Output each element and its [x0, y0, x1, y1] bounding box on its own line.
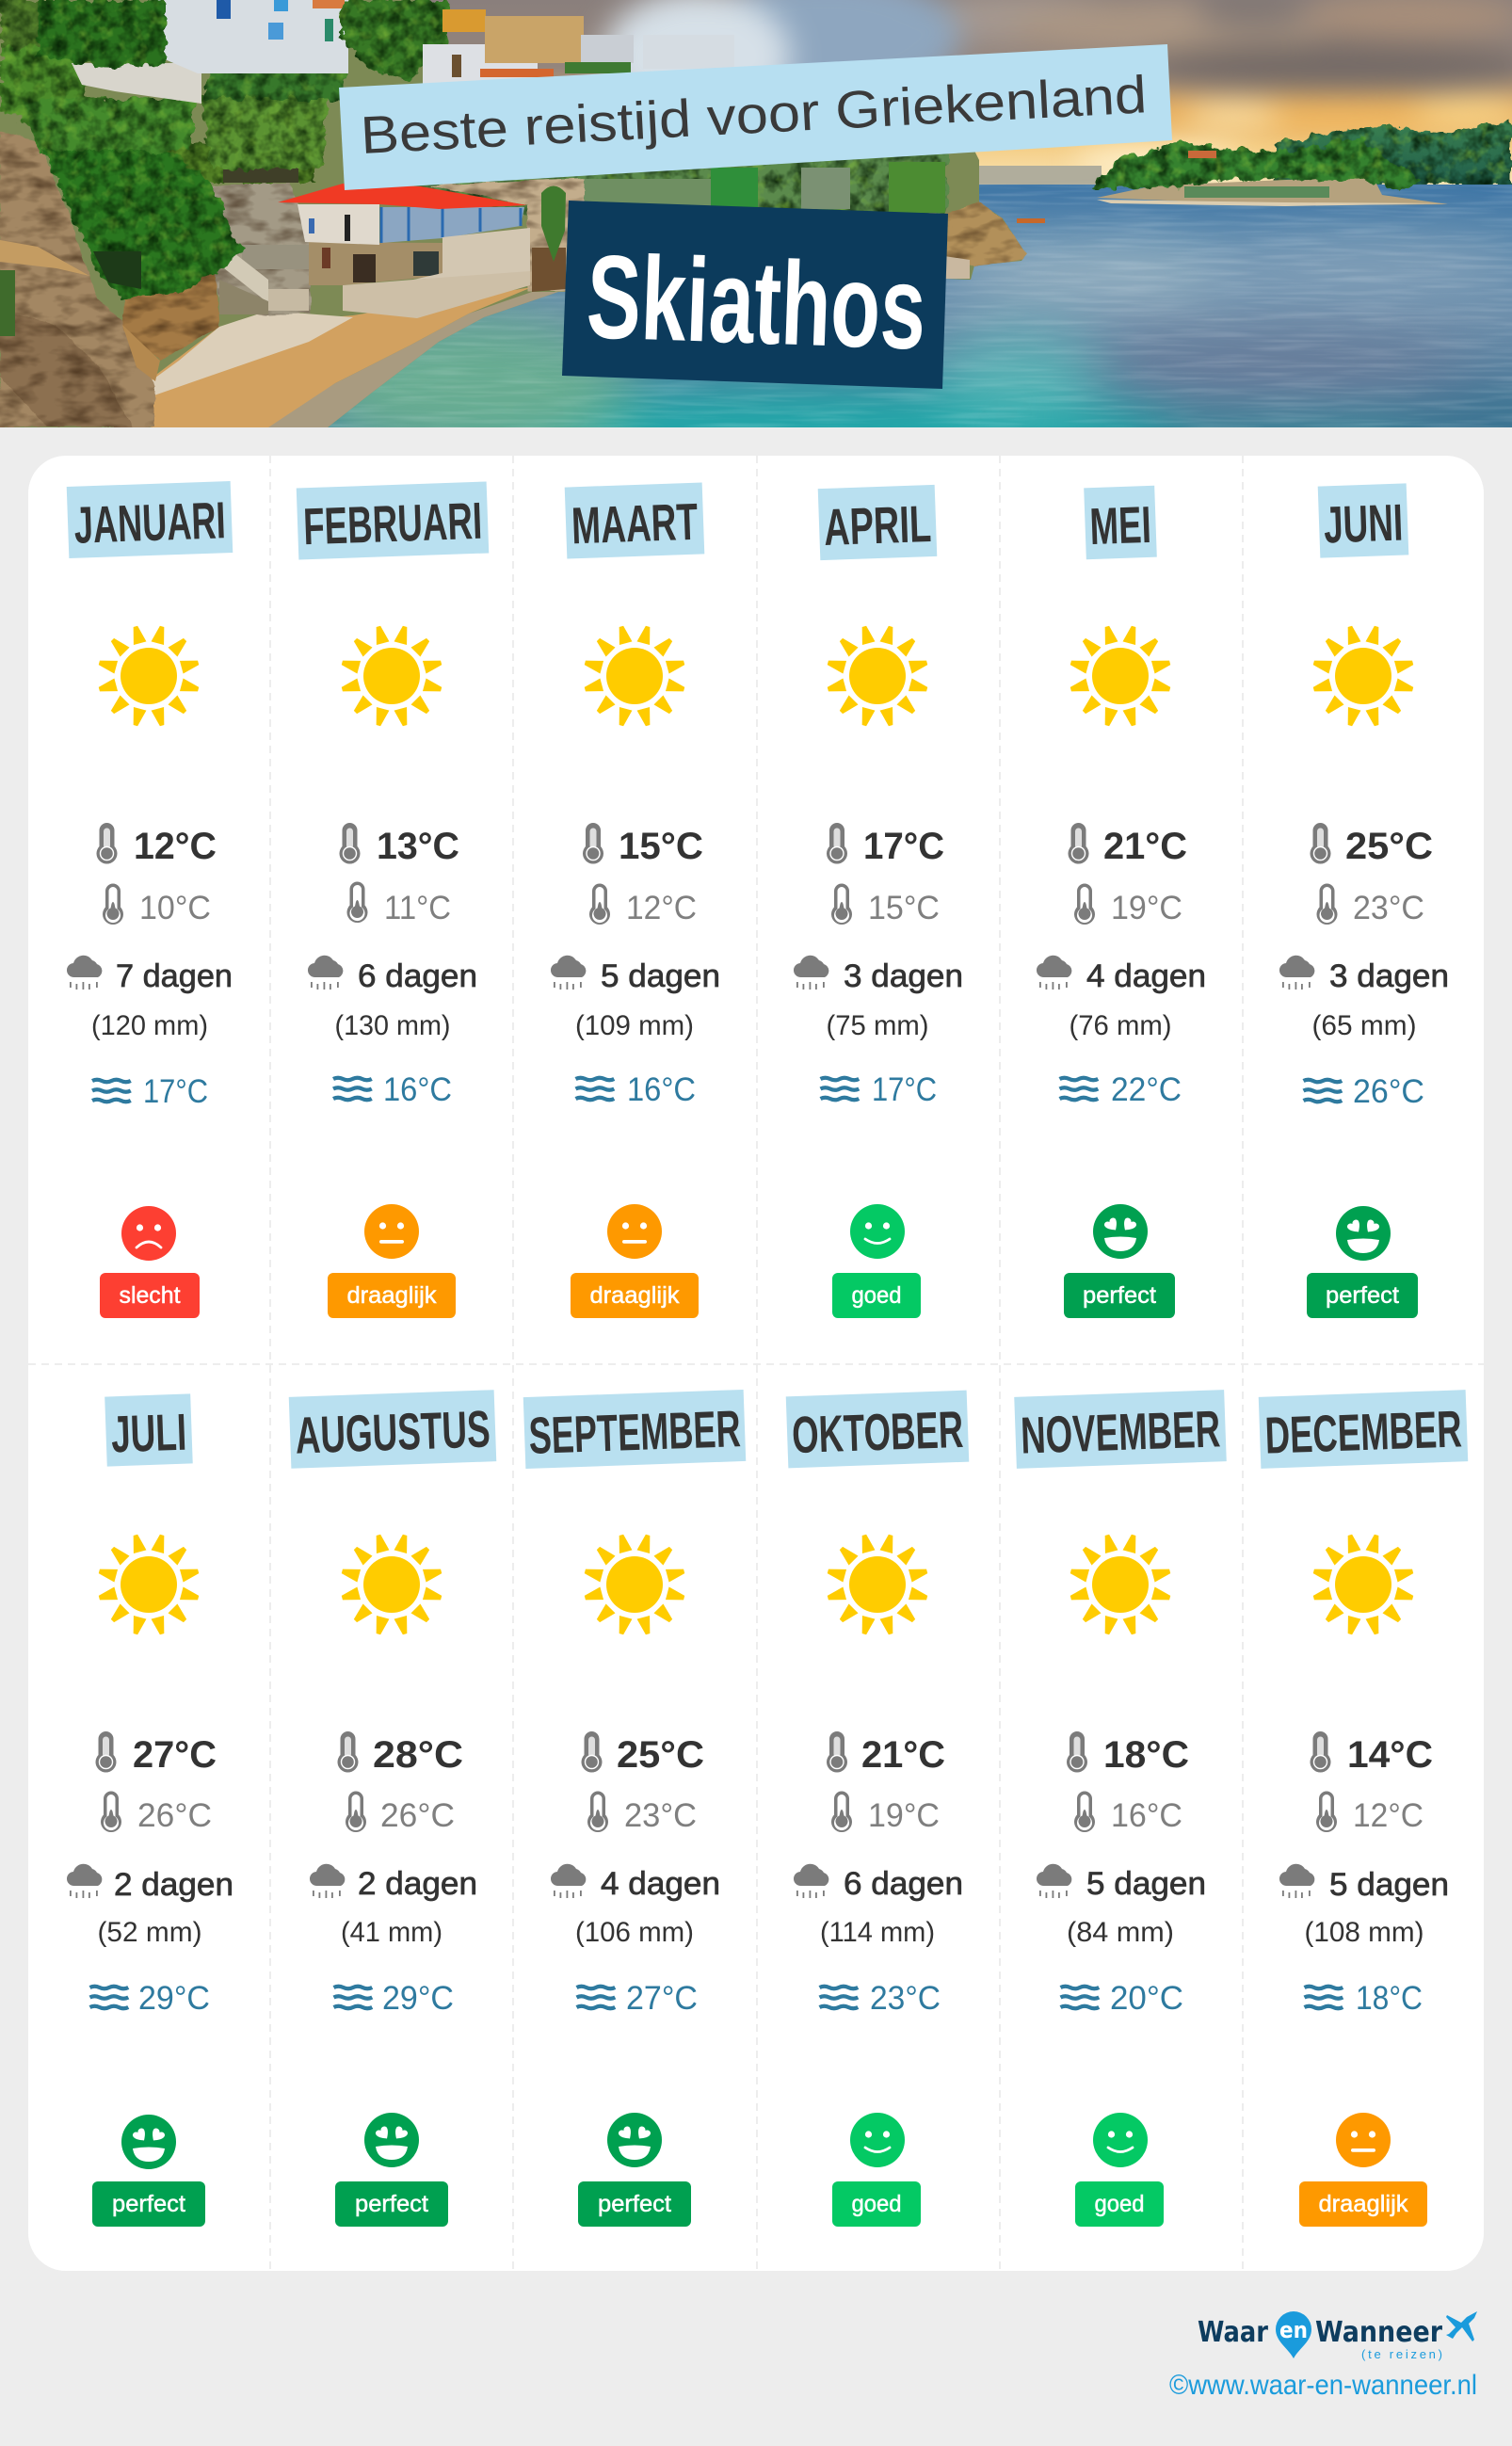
panel: oktober	[786, 1391, 969, 2227]
sea temperature: 26°C	[1353, 1073, 1424, 1110]
month label: FEBRUARI	[302, 491, 483, 555]
high temperature	[96, 823, 217, 867]
sea temperature: 22°C	[1111, 1071, 1182, 1108]
sea temperature	[821, 1071, 937, 1108]
low temperature: 26°C	[137, 1797, 212, 1834]
sea temperature	[1303, 1073, 1424, 1110]
rain days: 4 dagen	[1086, 958, 1206, 994]
low temperature: 11°C	[384, 890, 451, 926]
sea temperature: 20°C	[1110, 1980, 1183, 2017]
sea temperature: 29°C	[138, 1980, 210, 2017]
rainfall: (130 mm)	[335, 1010, 450, 1041]
sea temperature	[1060, 1980, 1183, 2017]
rain days	[551, 1864, 720, 1902]
sea temperature: 18°C	[1356, 1980, 1423, 2017]
rainfall: (76 mm)	[1070, 1010, 1171, 1041]
month label: AUGUSTUS	[295, 1399, 491, 1465]
high temperature	[827, 823, 944, 867]
source url: ©www.waar-en-wanneer.nl	[1169, 2370, 1477, 2401]
high temperature: 27°C	[133, 1734, 217, 1776]
icon: map pin	[1276, 2311, 1311, 2358]
high temperature: 28°C	[373, 1734, 463, 1776]
month label	[565, 482, 704, 559]
houses on top of hill	[72, 63, 201, 104]
high temperature	[1068, 823, 1187, 867]
rating: perfect	[335, 2113, 448, 2227]
low temperature	[1074, 883, 1182, 926]
panel: mei	[1037, 486, 1206, 1318]
rainfall: (65 mm)	[1312, 1010, 1416, 1041]
rating: perfect	[92, 2115, 205, 2227]
islet	[1097, 176, 1448, 205]
rainfall: (106 mm)	[575, 1917, 694, 1948]
low temperature	[587, 1791, 697, 1834]
rain days: 2 dagen	[358, 1866, 477, 1902]
title banner: Skiathos	[585, 230, 928, 375]
header photo: Skiathos harbour	[0, 0, 1512, 427]
rating: goed: goed	[1094, 2191, 1145, 2217]
rainfall: (108 mm)	[1305, 1917, 1424, 1948]
low temperature	[103, 883, 211, 926]
rain days	[1279, 956, 1449, 994]
panel: februari	[297, 481, 489, 1318]
panel: juni	[1279, 483, 1449, 1318]
icon: sun	[1070, 1534, 1171, 1635]
sea temperature: 17°C	[872, 1071, 937, 1108]
high temperature	[1311, 823, 1433, 867]
month label: OKTOBER	[791, 1400, 964, 1464]
low temperature: 23°C	[624, 1797, 697, 1834]
rain days: 7 dagen	[116, 958, 233, 994]
rain days: 5 dagen	[1329, 1867, 1449, 1903]
month label: JUNI	[1323, 493, 1404, 554]
rain days: 6 dagen	[358, 958, 477, 994]
icon: sun	[98, 1534, 200, 1635]
sea temperature	[333, 1980, 454, 2017]
rating: draaglijk: draaglijk	[346, 1282, 437, 1309]
month label	[67, 481, 233, 558]
month label	[818, 485, 937, 560]
low temperature: 23°C	[1353, 890, 1424, 926]
rainfall: (114 mm)	[820, 1917, 935, 1948]
high temperature	[1311, 1731, 1433, 1776]
rain days	[794, 956, 963, 994]
icon: sun	[341, 1534, 442, 1635]
month label	[786, 1391, 969, 1468]
rain days: 3 dagen	[1329, 958, 1449, 994]
rating: perfect: perfect	[1083, 1282, 1156, 1309]
rating: goed: goed	[851, 1282, 902, 1309]
high temperature: 21°C	[861, 1734, 945, 1776]
high temperature	[582, 1731, 704, 1776]
rating: goed: goed	[851, 2191, 902, 2217]
month label	[105, 1393, 193, 1467]
sea temperature	[1305, 1980, 1423, 2017]
panel: september	[523, 1390, 746, 2227]
rating: goed	[832, 2113, 921, 2227]
month label: NOVEMBER	[1020, 1399, 1221, 1465]
trees	[151, 141, 316, 182]
rating: draaglijk	[1299, 2113, 1427, 2227]
rainfall: (75 mm)	[827, 1010, 928, 1041]
month label: JULI	[110, 1403, 187, 1463]
rain days	[551, 956, 720, 994]
rating: goed	[1075, 2113, 1164, 2227]
low temperature	[346, 881, 451, 926]
high temperature	[583, 823, 703, 867]
icon: sun	[1070, 625, 1171, 727]
sea temperature: 16°C	[383, 1071, 452, 1108]
high temperature: 17°C	[863, 826, 944, 867]
rain days: 6 dagen	[844, 1866, 963, 1902]
title banner	[562, 201, 948, 389]
low temperature: 12°C	[626, 890, 697, 926]
low temperature	[346, 1791, 455, 1834]
rating: perfect: perfect	[598, 2191, 671, 2217]
rain days: 3 dagen	[844, 958, 963, 994]
rainfall: (109 mm)	[575, 1010, 694, 1041]
panel: november	[1014, 1390, 1227, 2227]
logo: Waar en Wanneer: (te reizen)	[1361, 2347, 1442, 2361]
high temperature	[96, 1731, 217, 1776]
logo: Waar en Wanneer: Wanneer	[1315, 2316, 1442, 2349]
month label: MAART	[571, 492, 699, 555]
high temperature: 21°C	[1103, 826, 1187, 867]
rain days: 5 dagen	[1086, 1866, 1206, 1902]
icon: sun	[827, 625, 928, 727]
sea temperature	[333, 1071, 452, 1108]
low temperature: 19°C	[868, 1797, 940, 1834]
icon: sun	[1312, 625, 1414, 727]
logo: Waar en Wanneer	[1198, 2311, 1477, 2361]
high temperature	[1067, 1731, 1189, 1776]
month label	[1084, 486, 1157, 559]
month label	[523, 1390, 746, 1469]
rating: goed	[832, 1204, 921, 1318]
rating: perfect	[1064, 1204, 1175, 1318]
low temperature: 26°C	[380, 1797, 455, 1834]
rating: draaglijk: draaglijk	[589, 1282, 680, 1309]
rain days: 4 dagen	[601, 1866, 720, 1902]
rating: draaglijk	[328, 1204, 456, 1318]
high temperature	[339, 823, 459, 867]
icon: map pin: en	[1279, 2317, 1308, 2343]
rain days	[308, 956, 477, 994]
calendar card	[28, 456, 1484, 2271]
panel: april	[794, 485, 963, 1318]
high temperature	[827, 1731, 945, 1776]
rainfall: (52 mm)	[98, 1917, 201, 1948]
rain days	[1037, 1864, 1206, 1902]
rating: perfect: perfect	[1326, 1282, 1399, 1309]
high temperature: 15°C	[619, 826, 703, 867]
sea temperature: 23°C	[870, 1980, 941, 2017]
sea temperature	[90, 1980, 210, 2017]
icon: sun	[1312, 1534, 1414, 1635]
icon: sun	[827, 1534, 928, 1635]
month label	[1014, 1390, 1227, 1469]
icon: sun	[98, 625, 200, 727]
low temperature	[589, 883, 697, 926]
sea temperature: 17°C	[143, 1073, 208, 1110]
high temperature: 14°C	[1347, 1734, 1433, 1776]
month label: MEI	[1089, 495, 1152, 555]
month label: APRIL	[823, 494, 932, 556]
low temperature	[1316, 883, 1424, 926]
low temperature: 15°C	[868, 890, 940, 926]
sea temperature	[92, 1073, 208, 1110]
low temperature: 16°C	[1111, 1797, 1182, 1834]
sea temperature	[576, 1071, 696, 1108]
high temperature: 18°C	[1103, 1734, 1189, 1776]
month label: SEPTEMBER	[528, 1399, 742, 1465]
low temperature	[831, 883, 940, 926]
high temperature: 25°C	[617, 1734, 704, 1776]
low temperature	[1074, 1791, 1182, 1834]
rain days	[67, 1864, 233, 1903]
high temperature	[337, 1731, 463, 1776]
rating: perfect	[1307, 1206, 1418, 1318]
rating: slecht	[100, 1206, 200, 1318]
rain days	[1037, 956, 1206, 994]
rating: perfect: perfect	[112, 2191, 185, 2217]
rainfall: (41 mm)	[341, 1917, 442, 1948]
rain days	[794, 1864, 963, 1902]
sea temperature: 16°C	[627, 1071, 696, 1108]
sea temperature: 27°C	[626, 1980, 698, 2017]
month label	[289, 1390, 496, 1469]
month label	[297, 481, 489, 560]
rain days	[67, 956, 233, 994]
icon: sun	[584, 1534, 685, 1635]
rating: draaglijk	[571, 1204, 699, 1318]
panel: december	[1259, 1390, 1468, 2227]
water edge and beach	[264, 292, 558, 427]
subtitle banner: Beste reistijd voor Griekenland	[359, 64, 1148, 165]
rating: draaglijk: draaglijk	[1318, 2191, 1408, 2217]
icon: plane	[1446, 2311, 1477, 2341]
high temperature: 25°C	[1345, 826, 1433, 867]
panel: januari	[67, 481, 233, 1318]
rating: perfect: perfect	[355, 2191, 428, 2217]
sea temperature	[576, 1980, 698, 2017]
month label: JANUARI	[73, 491, 227, 555]
low temperature	[1316, 1791, 1424, 1834]
terraces and stone walls	[428, 179, 584, 292]
panel: maart	[551, 482, 720, 1318]
high temperature: 13°C	[377, 826, 459, 867]
low temperature	[831, 1791, 940, 1834]
rain days	[310, 1864, 477, 1902]
icon: sun	[584, 625, 685, 727]
cliffs and vegetation	[0, 0, 1026, 427]
rating: slecht: slecht	[119, 1282, 181, 1309]
high temperature: 12°C	[134, 826, 217, 867]
cliff	[0, 132, 154, 427]
panel: juli	[67, 1393, 233, 2227]
subtitle banner	[339, 44, 1172, 190]
rain days: 5 dagen	[601, 958, 720, 994]
icon: sun	[341, 625, 442, 727]
sea temperature	[819, 1980, 941, 2017]
low temperature: 19°C	[1111, 890, 1182, 926]
month label	[1318, 483, 1408, 558]
sea temperature: 29°C	[382, 1980, 454, 2017]
rating: perfect	[578, 2113, 691, 2227]
logo: Waar en Wanneer: Waar	[1198, 2316, 1268, 2349]
low temperature: 12°C	[1353, 1797, 1424, 1834]
panel: augustus	[289, 1390, 496, 2227]
sea temperature	[1060, 1071, 1182, 1108]
house	[278, 184, 530, 318]
rain days: 2 dagen	[114, 1867, 233, 1903]
rainfall: (120 mm)	[91, 1010, 208, 1041]
low temperature	[101, 1791, 212, 1834]
rainfall: (84 mm)	[1067, 1917, 1174, 1948]
low temperature: 10°C	[139, 890, 211, 926]
rain days	[1279, 1864, 1449, 1903]
